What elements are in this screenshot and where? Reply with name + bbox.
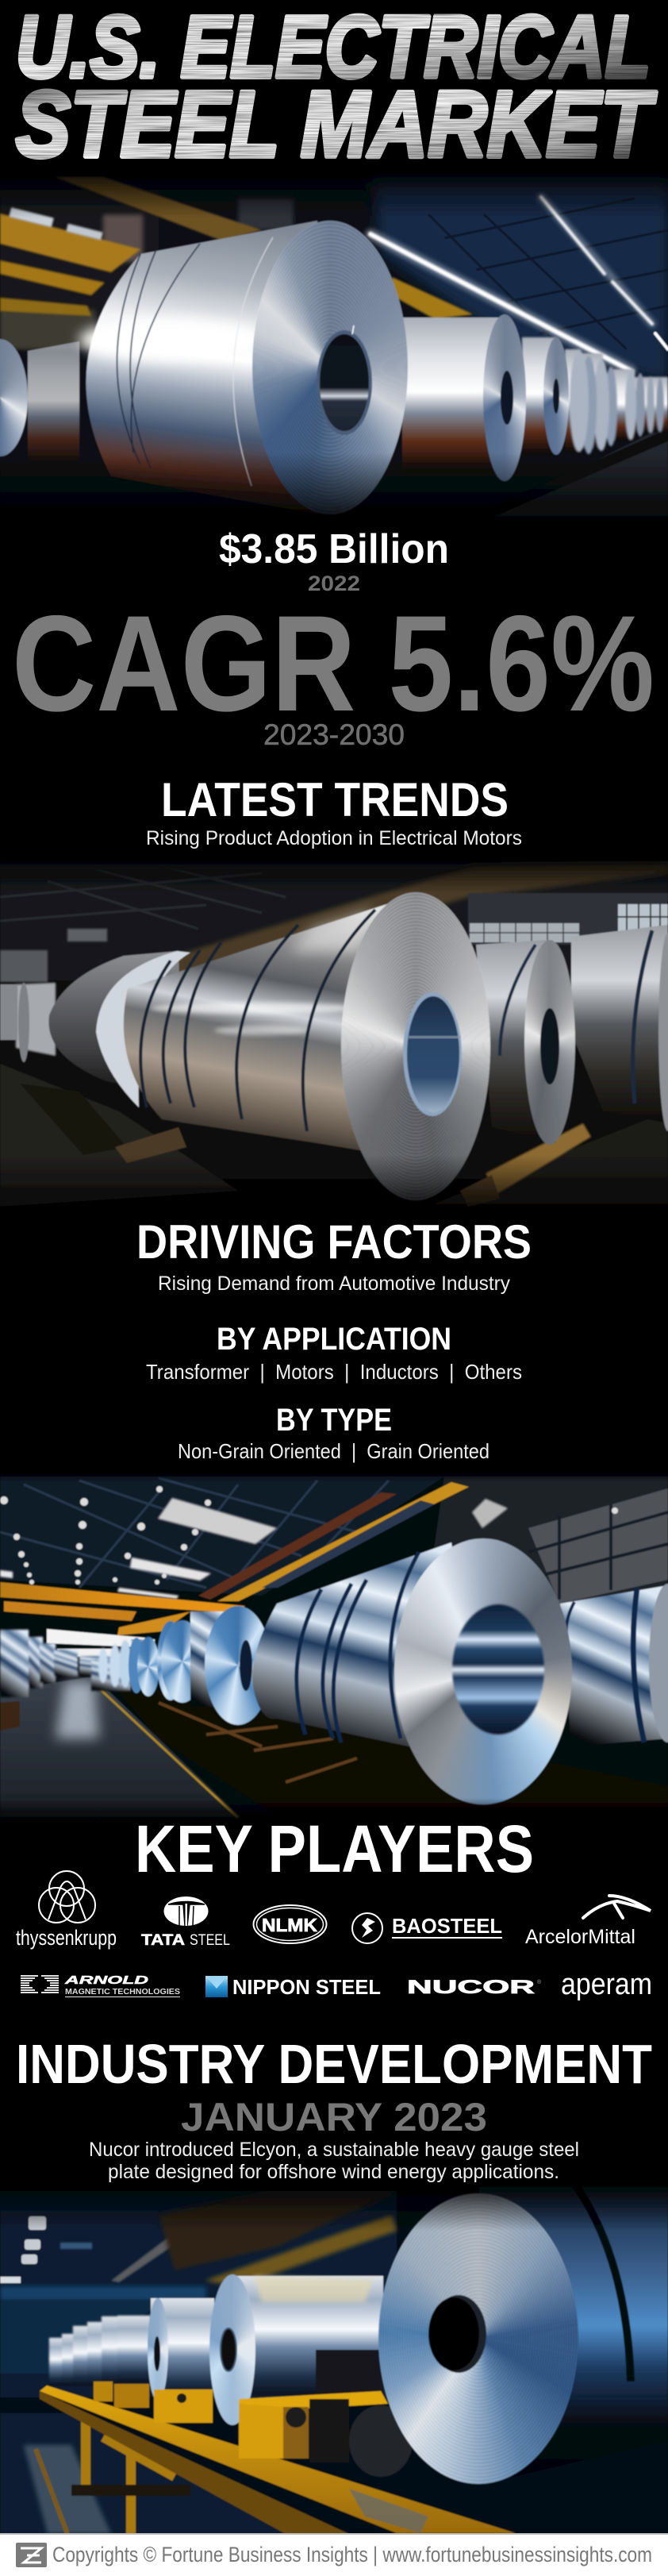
CAGR period: 2023-2030 (263, 718, 405, 751)
logo: thyssenkrupp (16, 1871, 117, 1950)
ceiling lights (0, 1486, 618, 1584)
driving factors text: Rising Demand from Automotive Industry (158, 1273, 510, 1295)
yellow rail (40, 2385, 516, 2533)
logo: thyssenkrupp: thyssenkrupp (16, 1926, 117, 1950)
photo: large silver coil in dark warehouse (0, 853, 668, 1219)
yellow gantry (217, 1482, 469, 1601)
coil row (91, 1640, 132, 1691)
far windows (47, 1629, 145, 1647)
pallet (486, 1123, 591, 1195)
logos: key players (16, 1871, 652, 2001)
photo: coils on yellow rail (0, 2179, 668, 2534)
logo: Nippon Steel: NIPPON STEEL (232, 1975, 381, 1999)
main coil body (251, 1542, 453, 1748)
logo: Arnold Magnetic Technologies: ARNOLD (63, 1973, 148, 1987)
main coil face (394, 1538, 572, 1804)
logo: Baosteel: BAOSTEEL (392, 1914, 502, 1938)
wall panels (528, 1488, 668, 1604)
logo: NLMK: NLMK (262, 1915, 317, 1935)
driving factors heading: DRIVING FACTORS (136, 1215, 532, 1269)
main coil (479, 2179, 668, 2485)
logo: ArcelorMittal (525, 1896, 651, 1948)
right coil (560, 1585, 668, 1746)
logo: ArcelorMittal: ArcelorMittal (525, 1926, 635, 1948)
photo: steel coils in warehouse with orange beams (0, 163, 668, 529)
logo: Nucor (407, 1977, 542, 1998)
by type heading: BY TYPE (276, 1403, 392, 1438)
logo: Nucor: ® (537, 1979, 542, 1985)
left coils (28, 341, 79, 464)
icon: Fortune Business Insights logo (16, 2543, 47, 2567)
fades (0, 853, 668, 893)
yellow brackets (94, 2382, 113, 2401)
lower floor (0, 2413, 317, 2534)
fades (0, 163, 668, 218)
far right coil (571, 925, 668, 1123)
latest trends heading: LATEST TRENDS (161, 773, 509, 826)
floor (0, 1677, 246, 1822)
market size year: 2022 (308, 572, 360, 595)
light strips (370, 197, 668, 371)
right coil (476, 940, 555, 1143)
logo: Aperam: aperam (561, 1968, 652, 2001)
distant coils (522, 337, 668, 455)
second coil (232, 2276, 383, 2395)
floor (493, 425, 668, 518)
rail legs (86, 2417, 175, 2534)
title (16, 0, 657, 177)
photo: row of blue-lit coils in factory (0, 1469, 668, 1822)
floor (0, 1064, 238, 1207)
application segments: Transformer | Motors | Inductors | Others (146, 1360, 522, 1384)
far left coils (0, 1630, 127, 1697)
orange beams (0, 177, 473, 319)
logo: Tata Steel: STEEL (190, 1932, 230, 1949)
small left coils (16, 983, 56, 1056)
date: JANUARY 2023 (181, 2095, 487, 2139)
market size value: $3.85 Billion (219, 526, 449, 572)
main coil face (341, 892, 490, 1200)
logo: Arnold Magnetic Technologies: MAGNETIC TECHNOLOGIES (65, 1988, 180, 1996)
logo: Arnold Magnetic Technologies (21, 1973, 180, 1997)
logo: NLMK (254, 1905, 327, 1943)
logo: Tata Steel: TATA (141, 1932, 185, 1949)
industry development text (89, 2139, 579, 2183)
distant coils (49, 2316, 151, 2385)
key players heading: KEY PLAYERS (135, 1812, 534, 1886)
pallets (0, 1701, 20, 1731)
latest trends text: Rising Product Adoption in Electrical Motors (146, 827, 522, 849)
left section of main coil (48, 951, 182, 1095)
industry development text: Nucor introduced Elcyon, a sustainable heavy gauge steel (89, 2139, 579, 2161)
by application heading: BY APPLICATION (217, 1322, 451, 1357)
logo: Nucor: NUCOR (407, 1977, 535, 1998)
main coil body (123, 903, 387, 1151)
footer bar (0, 2533, 668, 2576)
skylights (0, 1498, 508, 1599)
type segments: Non-Grain Oriented | Grain Oriented (178, 1439, 489, 1463)
main coil (86, 221, 317, 514)
industry development text: plate designed for offshore wind energy applications. (108, 2161, 559, 2183)
logo: Tata Steel (141, 1896, 230, 1949)
logo: Baosteel (352, 1913, 502, 1943)
